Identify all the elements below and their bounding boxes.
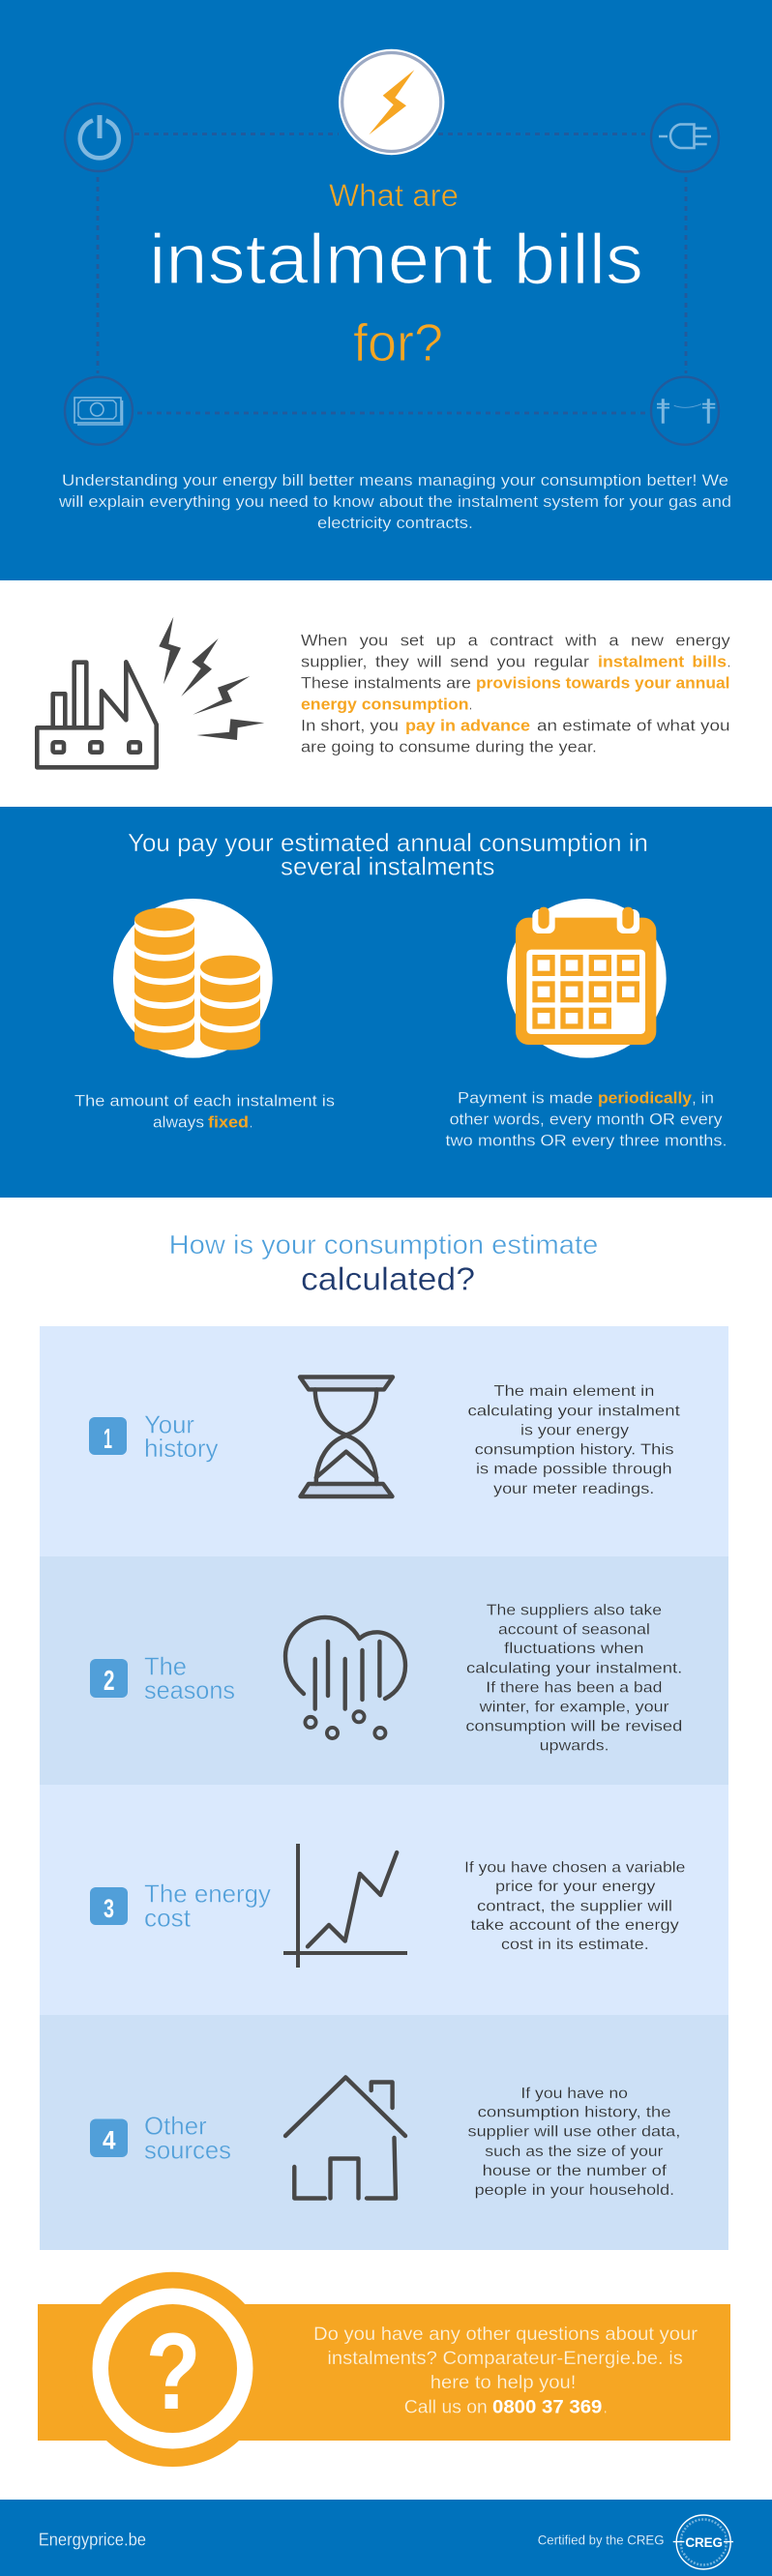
- icon: CREG seal: [673, 2515, 733, 2569]
- text: periodic payment: Payment is made: [458, 1090, 593, 1108]
- badge: number 4: 4: [103, 2126, 116, 2155]
- label: your history: Your: [144, 1410, 194, 1439]
- text: other sources explanation: If you have no: [520, 2086, 628, 2102]
- text: contract paragraph: .: [469, 696, 472, 714]
- title: for?: [353, 312, 443, 372]
- icon: power button: [65, 104, 133, 171]
- heading: consumption estimate: [169, 1229, 598, 1296]
- text: fixed amount: The amount of each instalment is: [74, 1093, 335, 1110]
- label: other sources: sources: [144, 2136, 231, 2165]
- text: energy cost explanation: [464, 1859, 686, 1953]
- label: your history: history: [144, 1434, 219, 1463]
- text: contact call to action: [313, 2324, 698, 2417]
- icon: CREG seal: CREG: [685, 2535, 723, 2550]
- text: history explanation: your meter readings.: [493, 1481, 654, 1497]
- text: contract paragraph: supplier, they will send you regular: [301, 654, 590, 671]
- panel: instalments: [0, 807, 772, 1198]
- text: seasons explanation: fluctuations when: [504, 1641, 644, 1657]
- label: the energy cost: The energy: [144, 1880, 271, 1909]
- title: What are: [329, 178, 459, 213]
- text: energy cost explanation: price for your energy: [495, 1879, 655, 1895]
- panel: contract explanation: [0, 580, 772, 807]
- text: fixed amount: always: [153, 1114, 204, 1132]
- badge: number 3: [90, 1887, 128, 1925]
- text: contract paragraph: When you set up a contract with a new energy: [301, 633, 731, 650]
- callout: questions: [38, 2272, 730, 2467]
- icon: snow cloud: [285, 1617, 405, 1738]
- text: contract paragraph: In short, you: [301, 718, 399, 735]
- text: seasons explanation: [465, 1602, 682, 1755]
- label: other sources: [144, 2112, 231, 2165]
- text: periodic payment: other words, every month OR every: [450, 1111, 723, 1129]
- label: your history: [144, 1410, 219, 1463]
- label: other sources: Other: [144, 2112, 207, 2141]
- icon: line chart: [283, 1844, 407, 1968]
- badge: number 1: 1: [104, 1424, 112, 1455]
- text: other sources explanation: supplier will use other data,: [468, 2124, 680, 2141]
- text: contract paragraph: .: [727, 654, 730, 671]
- badge: number 2: [90, 1659, 128, 1698]
- text: other sources explanation: such as the size of your: [485, 2144, 664, 2160]
- text: seasons explanation: calculating your instalment.: [466, 1660, 682, 1677]
- label: the energy cost: cost: [144, 1904, 192, 1933]
- text: history explanation: consumption history. This: [475, 1442, 674, 1459]
- panel: 3 the energy cost: [40, 1785, 728, 2015]
- text: contract paragraph: These instalments are: [301, 675, 471, 693]
- heading: pay in instalments: several instalments: [281, 852, 495, 881]
- text: contract paragraph: pay in advance: [405, 718, 530, 735]
- text: history explanation: is your energy: [520, 1422, 629, 1439]
- text: periodic payment: periodically: [598, 1090, 693, 1108]
- text: periodic payment: two months OR every three months.: [445, 1133, 727, 1150]
- text: energy cost explanation: If you have chosen a variable: [464, 1859, 686, 1877]
- heading: pay in instalments: [128, 828, 648, 881]
- text: contact call to action: Do you have any other questions about your: [313, 2324, 698, 2345]
- text: other sources explanation: consumption history, the: [478, 2105, 671, 2120]
- text: introduction: will explain everything you need to know about the instalment system for your gas and: [58, 493, 731, 511]
- text: fixed amount: .: [250, 1114, 252, 1132]
- label: the seasons: The: [144, 1651, 187, 1680]
- text: introduction: electricity contracts.: [317, 515, 473, 532]
- text: introduction: [58, 472, 731, 532]
- text: contact call to action: instalments? Comparateur-Energie.be. is: [327, 2349, 683, 2369]
- text: contact call to action: here to help you!: [431, 2373, 576, 2393]
- text: other sources explanation: [468, 2086, 680, 2199]
- icon: question mark badge: ?: [146, 2311, 201, 2432]
- icon: banknotes: [65, 377, 133, 445]
- icon: house: [285, 2078, 405, 2198]
- text: energy cost explanation: take account of the energy: [470, 1917, 679, 1934]
- text: energy cost explanation: cost in its estimate.: [501, 1937, 649, 1953]
- text: contract paragraph: instalment bills: [598, 654, 727, 671]
- text: contract paragraph: provisions towards your annual: [476, 675, 729, 693]
- text: history explanation: The main element in: [493, 1383, 654, 1400]
- label: the energy cost: [144, 1880, 271, 1933]
- footer: [0, 2500, 772, 2576]
- panel: 4 other sources: [40, 2015, 728, 2250]
- text: seasons explanation: consumption will be revised: [465, 1719, 682, 1735]
- label: the seasons: seasons: [144, 1675, 235, 1704]
- text: seasons explanation: If there has been a bad: [486, 1679, 662, 1696]
- text: contact call to action: Call us on: [404, 2397, 488, 2417]
- title: [149, 178, 643, 372]
- text: contract paragraph: [301, 633, 731, 755]
- text: periodic payment: , in: [692, 1090, 714, 1108]
- heading: pay in instalments: You pay your estimated annual consumption in: [128, 828, 648, 857]
- icon: hourglass: [300, 1377, 393, 1496]
- footer brand: Energyprice.be: [39, 2531, 146, 2550]
- panel: 2 the seasons: [40, 1556, 728, 1785]
- text: contract paragraph: energy consumption: [301, 696, 468, 714]
- icon: factory with lightning bolts: [37, 617, 264, 767]
- text: fixed amount: fixed: [208, 1114, 249, 1132]
- text: other sources explanation: house or the number of: [483, 2163, 668, 2179]
- heading: consumption estimate: calculated?: [301, 1260, 475, 1296]
- badge: number 3: 3: [104, 1894, 114, 1923]
- title: instalment bills: [149, 221, 643, 299]
- icon: power lines: [651, 377, 719, 445]
- text: energy cost explanation: contract, the supplier will: [477, 1898, 672, 1915]
- text: seasons explanation: winter, for example, your: [479, 1700, 669, 1716]
- badge: number 2: 2: [104, 1666, 114, 1697]
- icon: calendar: [507, 899, 667, 1058]
- text: contract paragraph: an estimate of what you: [537, 718, 729, 735]
- text: seasons explanation: upwards.: [540, 1737, 609, 1755]
- text: periodic payment: [445, 1090, 727, 1150]
- text: seasons explanation: The suppliers also take: [487, 1602, 662, 1618]
- text: introduction: Understanding your energy bill better means managing your consumption better! We: [62, 472, 728, 489]
- icon: lightning bolt badge: [339, 49, 444, 155]
- heading: consumption estimate: How is your consumption estimate: [169, 1229, 598, 1259]
- icon: plug: [651, 104, 719, 172]
- text: history explanation: [468, 1383, 680, 1497]
- text: other sources explanation: people in your household.: [475, 2182, 674, 2199]
- text: history explanation: is made possible through: [476, 1462, 672, 1478]
- certification text: Certified by the CREG: [538, 2532, 664, 2548]
- badge: number 1: [89, 1417, 127, 1455]
- icon: question mark badge: [75, 2272, 270, 2467]
- text: contact call to action: .: [604, 2397, 608, 2417]
- text: contact call to action: 0800 37 369: [492, 2397, 602, 2417]
- text: fixed amount: [74, 1093, 335, 1132]
- text: seasons explanation: account of seasonal: [498, 1621, 650, 1638]
- badge: number 4: [90, 2118, 128, 2157]
- panel: 1 your history: [40, 1326, 728, 1556]
- panel: header: [0, 0, 772, 580]
- label: the seasons: [144, 1651, 235, 1704]
- icon: coin stacks: [113, 899, 273, 1058]
- text: history explanation: calculating your instalment: [468, 1403, 680, 1420]
- text: contract paragraph: are going to consume during the year.: [301, 738, 597, 755]
